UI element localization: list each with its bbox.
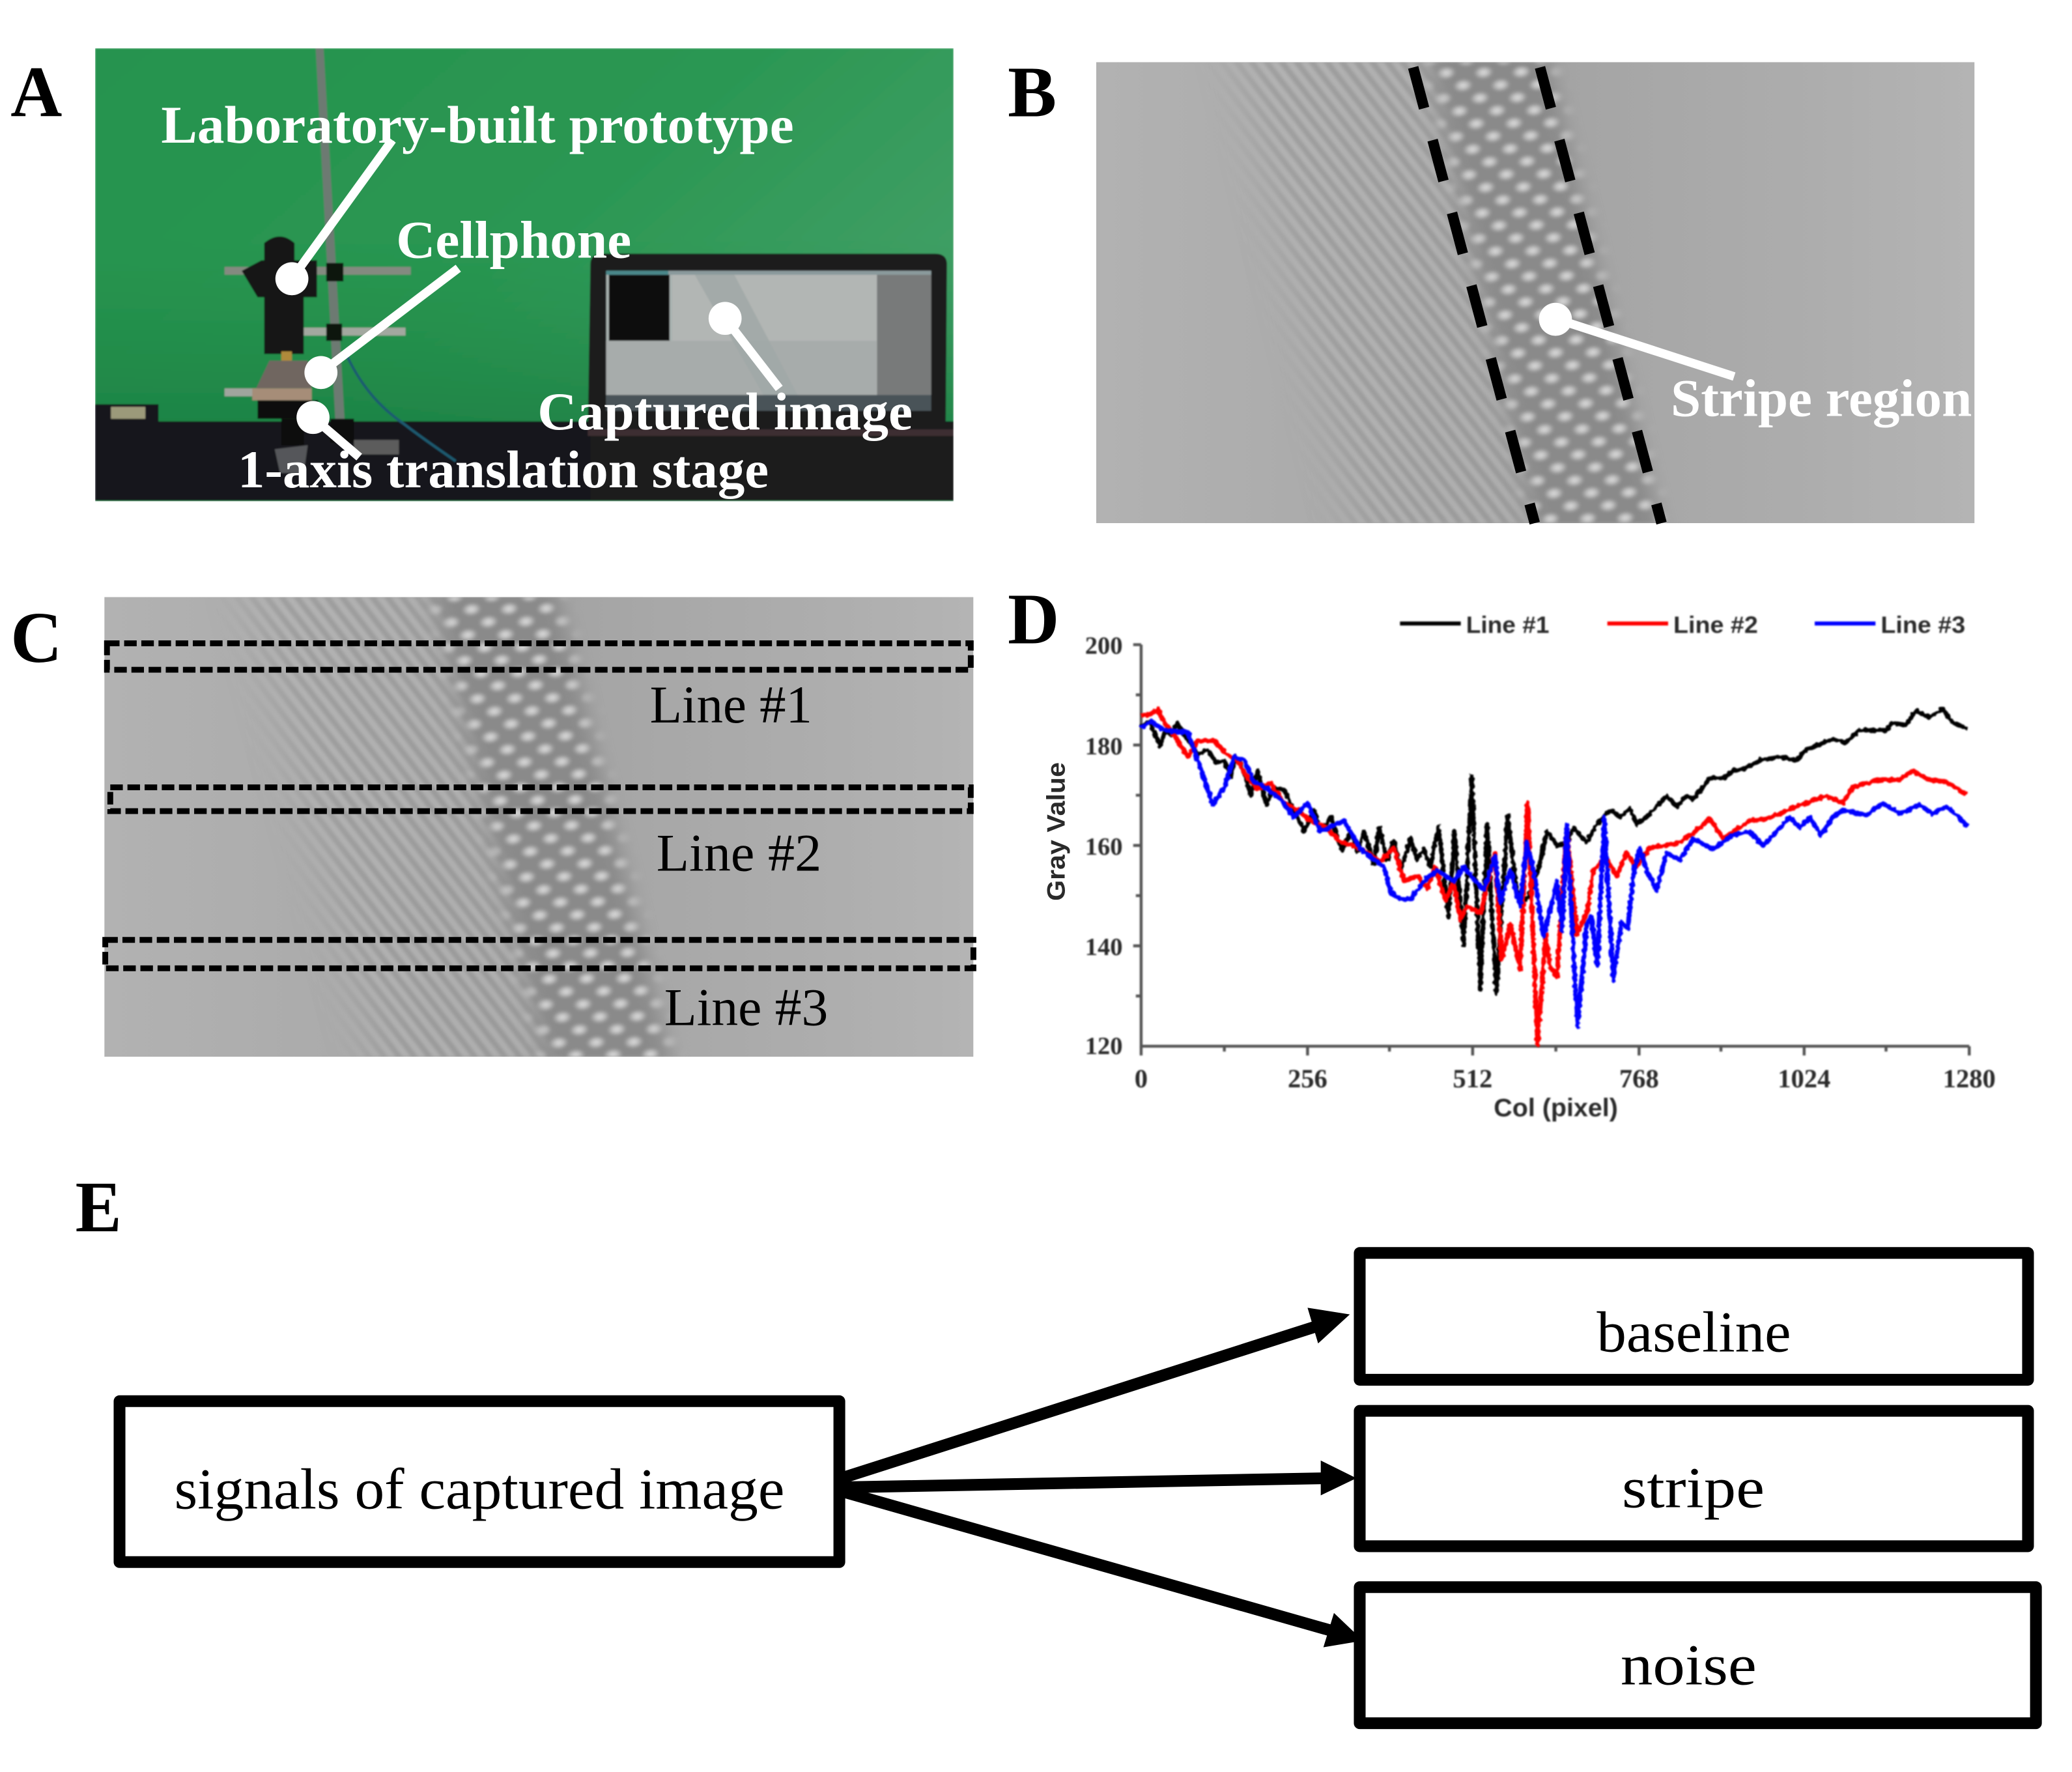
chart legend: Line #3: [1880, 611, 1965, 638]
panel A: laboratory prototype photograph: [95, 48, 954, 502]
y axis tick labels: 140: [1085, 934, 1123, 961]
y axis tick labels: 160: [1085, 833, 1123, 861]
dashed boundaries of stripe region: [1413, 67, 1662, 523]
line #2 red: [1141, 709, 1966, 1045]
x axis title: Col (pixel): [1494, 1094, 1618, 1122]
label: Laboratory-built prototype: Laboratory-built prototype: [161, 96, 794, 154]
y axis tick labels: 200: [1085, 633, 1123, 660]
box: stripe: [1359, 1411, 2028, 1546]
callout lines and dots in panel A: [276, 140, 779, 457]
label: Stripe region: Stripe region: [1671, 369, 1972, 428]
x axis tick labels: 768: [1619, 1064, 1659, 1093]
line region 1: [107, 644, 971, 670]
x axis tick labels: 0: [1135, 1064, 1148, 1093]
chart axes and ticks: [1133, 645, 1969, 1055]
callout line and dot in panel B: [1539, 303, 1734, 377]
label: Cellphone: Cellphone: [396, 210, 631, 269]
arrow to stripe: [838, 1461, 1356, 1495]
label: Line #2: Line #2: [657, 823, 821, 882]
panel label C: C: [10, 598, 62, 678]
panel label A: A: [10, 52, 62, 132]
chart data lines: [1141, 709, 1967, 1045]
x axis tick labels: 1024: [1778, 1064, 1830, 1093]
line #3 blue: [1141, 721, 1967, 1027]
label: Line #1: Line #1: [650, 676, 812, 734]
x axis tick labels: 1280: [1943, 1064, 1996, 1093]
y axis tick labels: 120: [1085, 1033, 1123, 1060]
box: noise: [1359, 1587, 2036, 1723]
y axis tick labels: 180: [1085, 733, 1123, 760]
box: baseline: baseline: [1597, 1300, 1791, 1364]
chart legend: Line #1: [1466, 611, 1549, 638]
panel B: stripe region image: [1096, 62, 1974, 523]
box: signals of captured image: signals of captured image: [175, 1458, 784, 1522]
box: stripe: stripe: [1622, 1457, 1765, 1521]
arrow to baseline: [838, 1308, 1350, 1479]
x axis tick labels: 256: [1288, 1064, 1327, 1093]
box: noise: noise: [1621, 1633, 1757, 1697]
y axis tick labels: [1085, 633, 1123, 1060]
panel E: signal decomposition diagram: [120, 1253, 2036, 1723]
line #1 black: [1141, 709, 1967, 993]
line region 3: [106, 940, 973, 968]
label: Line #3: Line #3: [664, 979, 828, 1037]
panel D: gray value line chart: [1042, 611, 1996, 1122]
y axis title: Gray Value: [1042, 762, 1070, 901]
panel label E: E: [76, 1167, 122, 1248]
label: 1-axis translation stage: 1-axis translation stage: [238, 440, 769, 499]
x axis tick labels: 512: [1453, 1064, 1492, 1093]
arrow to noise: [838, 1490, 1363, 1648]
label: Captured image: Captured image: [537, 382, 913, 441]
chart legend: [1400, 611, 1965, 638]
x axis tick labels: [1135, 1064, 1996, 1093]
panel C: image with line regions: [104, 597, 973, 1057]
chart legend: Line #2: [1673, 611, 1758, 638]
box: baseline: [1359, 1253, 2028, 1380]
box: signals of captured image: [120, 1401, 840, 1562]
line region 2: [110, 788, 971, 811]
panel label D: D: [1008, 580, 1059, 660]
panel label B: B: [1008, 52, 1057, 132]
